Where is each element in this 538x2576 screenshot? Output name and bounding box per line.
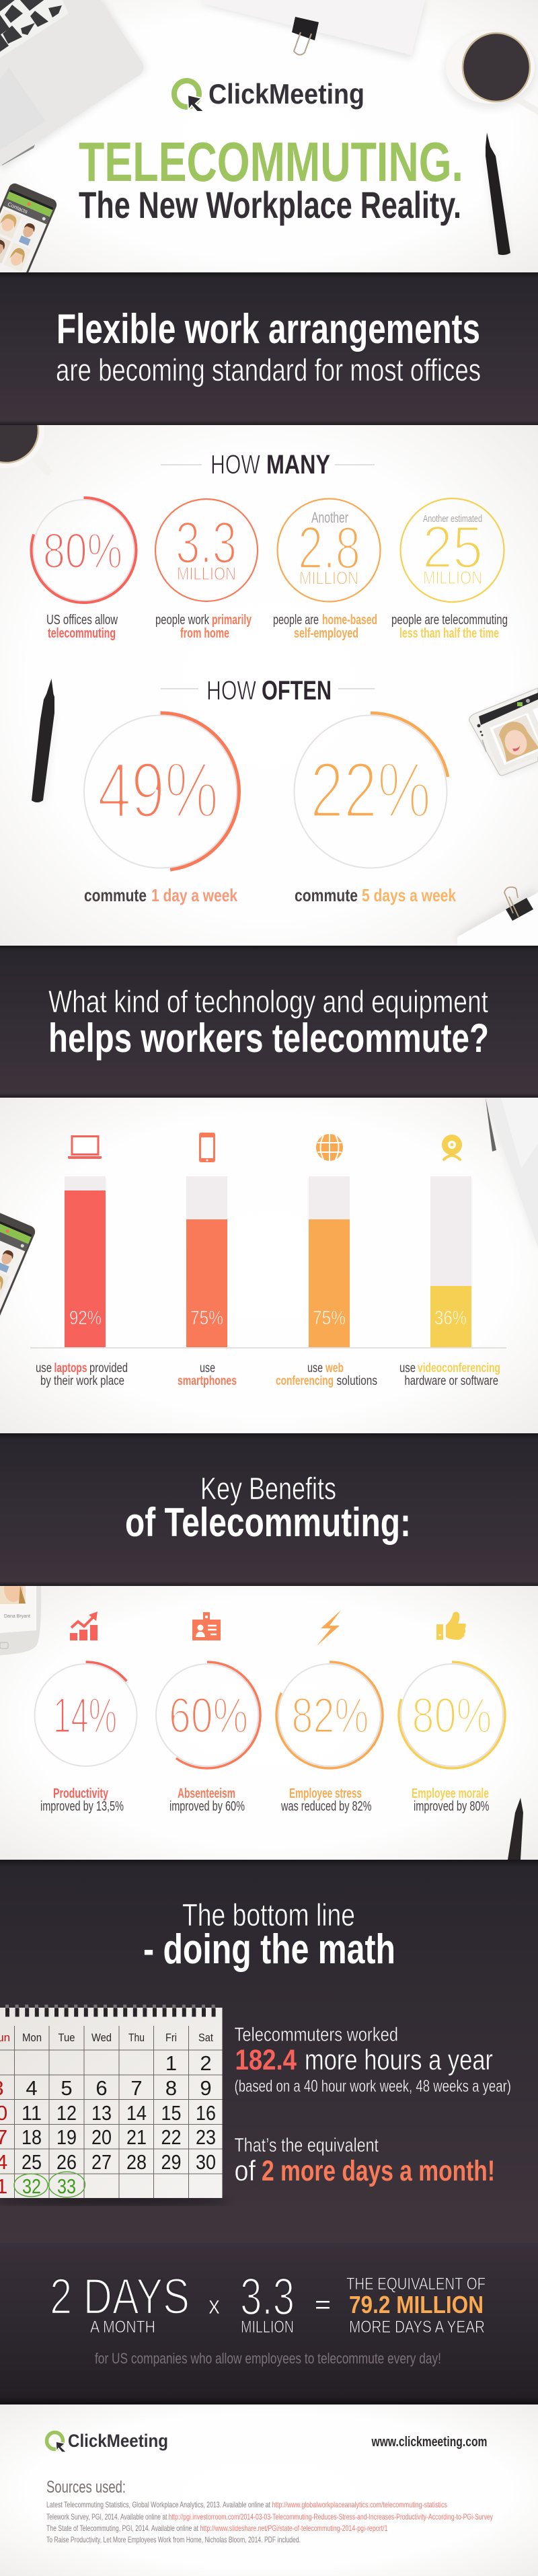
caption employee morale xyxy=(412,1786,490,1814)
calendar dates: 18 xyxy=(22,2125,42,2149)
stat circle 80% xyxy=(31,498,136,603)
logo footer: ClickMeeting xyxy=(68,2431,168,2451)
callout: hours worked xyxy=(234,2024,511,2096)
calendar dates xyxy=(0,2051,216,2198)
stat circle 3.3 million: 3.3 xyxy=(176,509,237,576)
calendar dates: 23 xyxy=(196,2125,216,2149)
heading how many: HOW xyxy=(210,450,260,480)
stat circle 3.3 million xyxy=(155,499,258,601)
sources heading: Sources used: xyxy=(46,2478,126,2497)
stat circle 60% xyxy=(154,1662,260,1768)
stat circle 14% xyxy=(32,1662,139,1768)
heading doing the math: - doing the math xyxy=(143,1926,395,1973)
heading how many: MANY xyxy=(266,450,330,480)
caption smartphones: smartphones xyxy=(178,1374,237,1388)
caption web conferencing xyxy=(276,1361,377,1388)
calendar dates: 13 xyxy=(91,2101,112,2125)
caption web conferencing: use xyxy=(307,1361,323,1375)
bar laptops xyxy=(65,1176,106,1347)
heading how often: OFTEN xyxy=(262,676,332,706)
white smartphone benefits xyxy=(0,1575,41,1655)
bar smartphones xyxy=(186,1176,227,1347)
smartphone photo left xyxy=(0,182,59,326)
icon: growth chart xyxy=(70,1612,98,1640)
icon: globe xyxy=(316,1134,343,1161)
callout: hours worked: Telecommuters worked xyxy=(234,2024,398,2046)
calendar dates: 28 xyxy=(126,2150,147,2174)
website: www.clickmeeting.com xyxy=(371,2435,487,2450)
stat circle 3.3 million: MILLION xyxy=(177,564,236,584)
stat circle 60%: 60% xyxy=(169,1688,248,1743)
caption absenteeism xyxy=(169,1786,245,1814)
caption videoconferencing: videoconferencing xyxy=(418,1361,500,1375)
stat circle 14%: 14% xyxy=(53,1688,117,1743)
stat circle 22% xyxy=(292,713,449,870)
calendar dates: 1 xyxy=(165,2051,177,2075)
calendar dates: 22 xyxy=(161,2125,182,2149)
calendar dates: 9 xyxy=(200,2076,212,2100)
caption employee stress: was reduced by 82% xyxy=(280,1799,372,1814)
icon: thumbs up xyxy=(436,1612,466,1640)
caption 25 million xyxy=(391,613,508,641)
calendar weekday header: Tue xyxy=(58,2031,75,2044)
caption employee morale: Employee morale xyxy=(412,1786,489,1801)
caption productivity: Productivity xyxy=(53,1786,109,1801)
sources list: http://www.slideshare.net/PGi/state-of-telecommuting-2014-pgi-report/1 xyxy=(200,2524,388,2533)
stat circle 22%: 22% xyxy=(310,746,431,834)
caption absenteeism: improved by 60% xyxy=(169,1799,245,1814)
calendar dates: 19 xyxy=(56,2125,77,2149)
calendar dates: 20 xyxy=(91,2125,112,2149)
stat circle 2.8 million xyxy=(277,499,381,601)
equation: result: 79.2 MILLION xyxy=(349,2291,484,2318)
calendar dates: 5 xyxy=(61,2076,73,2100)
caption 5 days a week: commute xyxy=(295,885,358,905)
calendar dates: 14 xyxy=(126,2101,147,2125)
calendar dates: 21 xyxy=(126,2125,147,2149)
equation: 3.3 million xyxy=(240,2267,295,2337)
caption laptops xyxy=(36,1361,128,1388)
heading how many xyxy=(161,450,375,480)
calendar dates: 29 xyxy=(161,2150,182,2174)
logo header: ClickMeeting xyxy=(208,78,364,110)
caption 80%: telecommuting xyxy=(48,626,116,641)
pen top right xyxy=(486,132,510,256)
white smartphone benefits: Dana Bryant xyxy=(4,1614,30,1619)
caption laptops: provided xyxy=(89,1361,128,1375)
caption productivity xyxy=(40,1786,124,1814)
calendar weekday header: Wed xyxy=(91,2031,112,2044)
caption 5 days a week: 5 days a week xyxy=(362,885,456,905)
laptop corner right xyxy=(486,1098,538,1251)
callout: hours worked: 182.4 xyxy=(235,2044,297,2076)
heading how often: HOW xyxy=(206,676,256,706)
stat circle 49% xyxy=(82,713,239,870)
calendar weekday header: Fri xyxy=(165,2031,177,2044)
coffee cup lower xyxy=(0,393,52,476)
calendar dates: 12 xyxy=(56,2101,77,2125)
caption 5 days a week xyxy=(295,885,456,905)
stat circle 25 million: MILLION xyxy=(423,568,482,588)
sources list xyxy=(46,2500,493,2544)
bar smartphones: 75% xyxy=(190,1308,223,1329)
calendar dates: 7 xyxy=(130,2076,143,2100)
calendar dates: 27 xyxy=(91,2150,112,2174)
caption videoconferencing: use xyxy=(399,1361,416,1375)
calendar dates: 30 xyxy=(196,2150,216,2174)
caption 1 day a week: commute xyxy=(84,885,147,905)
stat circle 80% morale: 80% xyxy=(412,1688,492,1743)
icon: lightning xyxy=(317,1610,341,1646)
sources list: Telework Survey, PGI, 2014. Available online at xyxy=(46,2512,167,2522)
pen lower right xyxy=(508,1798,523,1860)
band: bottom line background xyxy=(0,1860,538,2404)
smartphone photo left lower xyxy=(0,1209,37,1353)
heading bottom line: The bottom line xyxy=(182,1897,355,1932)
sources list: Latest Telecommuting Statistics, Global Workplace Analytics, 2013. Available online at xyxy=(46,2500,270,2509)
equation: 3.3 million: 3.3 xyxy=(240,2267,295,2326)
stat circle 80% morale xyxy=(399,1662,505,1768)
icon: webcam xyxy=(442,1135,462,1160)
caption 80%: US offices allow xyxy=(46,613,118,628)
callout: hours worked: more hours a year xyxy=(305,2044,493,2076)
calendar dates: 15 xyxy=(161,2101,182,2125)
caption laptops: by their work place xyxy=(40,1374,124,1388)
stat circle 2.8 million: MILLION xyxy=(299,568,358,588)
caption 1 day a week xyxy=(84,885,237,905)
caption 2.8 million: self-employed xyxy=(294,626,358,641)
heading bold: of Telecommuting: xyxy=(125,1500,411,1545)
caption employee stress: Employee stress xyxy=(289,1786,362,1801)
calendar weekday header: Sat xyxy=(198,2031,213,2044)
caption smartphones: use xyxy=(200,1361,215,1375)
stat circle 82% xyxy=(276,1662,383,1768)
bar web conferencing: 75% xyxy=(313,1308,346,1329)
calendar xyxy=(0,2006,229,2204)
equation: 2 days a month: A MONTH xyxy=(90,2318,155,2337)
note: for US companies who allow employees to telecommute every day! xyxy=(95,2350,441,2367)
calendar dates: 11 xyxy=(22,2101,42,2125)
paper sheet with binder clip xyxy=(202,0,425,59)
caption laptops: use xyxy=(36,1361,52,1375)
section background: how many and how often xyxy=(0,425,538,946)
calendar dates: 33 xyxy=(57,2174,76,2198)
caption employee stress xyxy=(280,1786,372,1814)
caption absenteeism: Absenteeism xyxy=(178,1786,235,1801)
caption 25 million: less than half the time xyxy=(399,626,499,641)
stat circle 2.8 million: Another xyxy=(311,509,348,526)
equation: result: MORE DAYS A YEAR xyxy=(349,2318,485,2337)
calendar dates: 6 xyxy=(95,2076,108,2100)
bar videoconferencing: 36% xyxy=(434,1308,467,1329)
equation: equals xyxy=(316,2301,330,2308)
calendar dates: 8 xyxy=(165,2076,177,2100)
section background: header xyxy=(0,0,538,272)
caption web conferencing: solutions xyxy=(336,1374,377,1388)
caption laptops: laptops xyxy=(54,1361,87,1375)
sources list: http://www.globalworkplaceanalytics.com/telecommuting-statistics xyxy=(272,2500,447,2509)
equation: 3.3 million: MILLION xyxy=(241,2318,294,2337)
equation: result: THE EQUIVALENT OF xyxy=(346,2275,486,2294)
bar videoconferencing xyxy=(430,1176,471,1347)
callout: days a month: of xyxy=(234,2155,256,2187)
stat circle 25 million: Another estimated xyxy=(423,513,482,525)
calendar dates: 2 xyxy=(200,2051,212,2075)
section background: technology bars xyxy=(0,1098,538,1433)
sources list: To Raise Productivity, Let More Employees Work from Home, Nicholas Bloom, 2014. PDF included. xyxy=(46,2535,301,2544)
calendar dates: 4 xyxy=(26,2076,38,2100)
stat circle 49%: 49% xyxy=(98,746,219,834)
caption 1 day a week: 1 day a week xyxy=(151,885,237,905)
caption 2.8 million: home-based xyxy=(322,613,377,628)
caption 80% xyxy=(46,613,118,641)
bar laptops: 92% xyxy=(69,1308,102,1329)
icon: id badge xyxy=(192,1612,221,1640)
icon: laptop xyxy=(68,1137,102,1159)
icon: smartphone xyxy=(199,1133,215,1162)
stat circle 25 million xyxy=(401,498,504,602)
caption 3.3 million xyxy=(155,613,252,641)
coffee cup xyxy=(444,31,538,115)
caption web conferencing: conferencing xyxy=(276,1374,334,1388)
band: flexible work arrangements xyxy=(0,272,538,425)
calendar weekday header: Mon xyxy=(22,2031,42,2044)
caption 3.3 million: primarily xyxy=(212,613,252,628)
stat circle 82%: 82% xyxy=(292,1688,369,1743)
callout: days a month: That’s the equivalent xyxy=(234,2135,379,2156)
caption 3.3 million: from home xyxy=(180,626,229,641)
heading regular: Key Benefits xyxy=(200,1471,336,1506)
caption web conferencing: web xyxy=(325,1361,344,1375)
tablet photo right xyxy=(469,688,538,777)
calendar dates: 32 xyxy=(22,2174,41,2198)
equation: multiply: x xyxy=(208,2291,220,2320)
calendar dates: 16 xyxy=(196,2101,216,2125)
caption videoconferencing xyxy=(399,1361,500,1388)
caption 3.3 million: people work xyxy=(155,613,210,628)
band: benefits xyxy=(0,1433,538,1586)
callout: days a month xyxy=(234,2135,495,2187)
caption 2.8 million xyxy=(273,613,377,641)
laptop photo top left xyxy=(0,0,145,171)
equation: result xyxy=(346,2275,486,2337)
caption 2.8 million: people are xyxy=(273,613,319,628)
calendar dates: 26 xyxy=(56,2150,77,2174)
section background: benefits xyxy=(0,1586,538,1860)
caption employee morale: improved by 80% xyxy=(414,1799,490,1814)
stat circle 80%: 80% xyxy=(43,523,122,578)
bar web conferencing xyxy=(309,1176,350,1347)
binder clip lower right xyxy=(456,887,538,946)
equation: 2 days a month: 2 DAYS xyxy=(50,2268,190,2324)
band: technology xyxy=(0,946,538,1098)
bar chart: equipment xyxy=(30,1176,506,1349)
heading how often xyxy=(161,676,375,706)
smartphone photo left: Contacts xyxy=(7,201,28,215)
caption videoconferencing: hardware or software xyxy=(405,1374,498,1388)
equation: 2 days a month xyxy=(50,2268,190,2337)
caption smartphones xyxy=(178,1361,237,1388)
caption productivity: improved by 13,5% xyxy=(40,1799,124,1814)
pen left xyxy=(32,679,55,804)
stat circle 2.8 million: 2.8 xyxy=(298,514,360,581)
calendar dates: 25 xyxy=(22,2150,42,2174)
stat circle 25 million: 25 xyxy=(422,513,483,580)
calendar weekday header xyxy=(0,2031,213,2044)
section background: footer xyxy=(0,2404,538,2576)
sources list: The State of Telecommuting, PGI, 2014. Available online at xyxy=(46,2524,198,2533)
calendar weekday header: Thu xyxy=(128,2031,145,2044)
